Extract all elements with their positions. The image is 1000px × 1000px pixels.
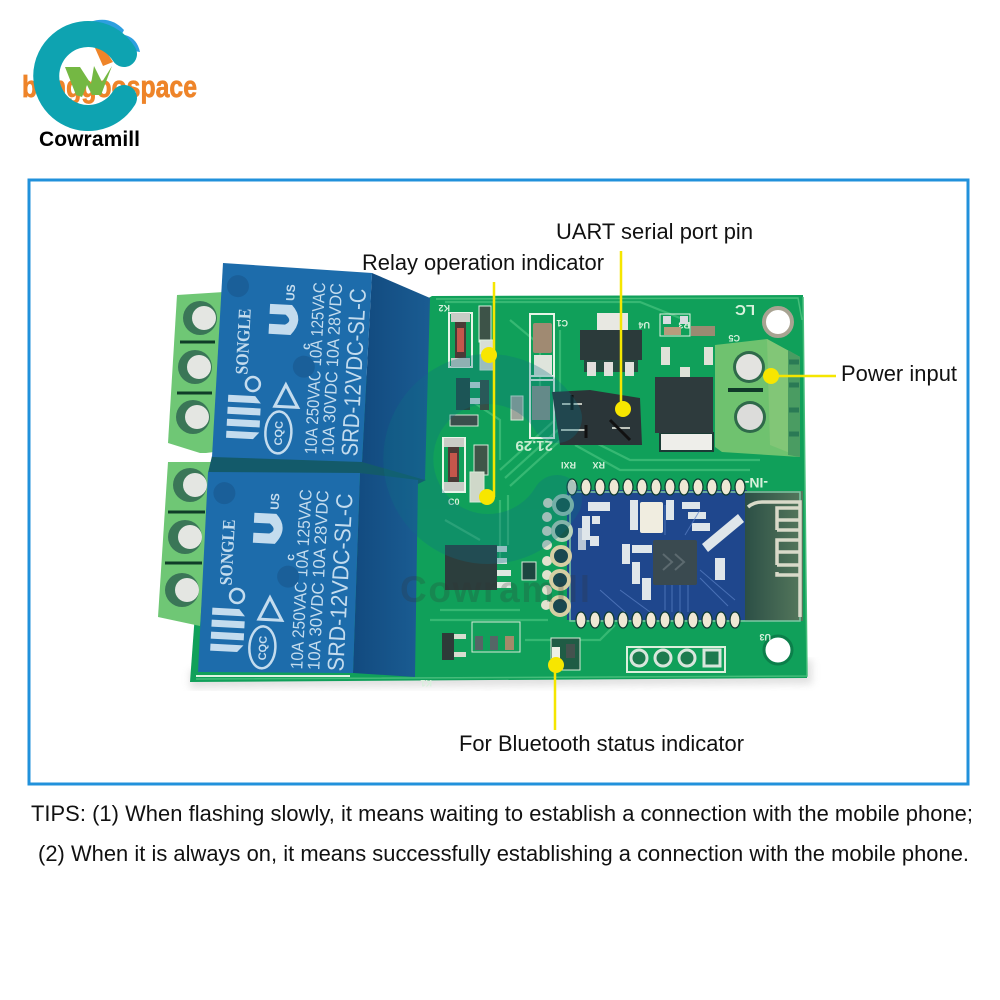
relay K2: 10A 250VAC 10A 125VAC [301,282,329,455]
relay K2: c [299,342,313,350]
callout: Bluetooth status indicator [459,657,744,756]
silkscreen marks: K1 [420,678,432,688]
faint logo watermark: Cowramill [400,569,590,610]
regulator U4 [580,313,642,376]
relay K1: CQC [257,636,270,661]
tips text [31,801,973,866]
power terminal block [715,339,800,457]
bluetooth module [541,479,803,628]
gap shadow between relays [208,456,426,484]
silkscreen marks: LC [735,301,755,318]
silkscreen marks: C0 [448,497,460,507]
tips text: (2) When it is always on, it means successfully establishing a connection with the mobile phone. [38,841,969,866]
relay K1: US [268,493,282,510]
silkscreen marks: U4 [638,320,650,330]
silkscreen marks: R3 [678,320,690,330]
silkscreen marks: U3 [759,632,771,642]
silkscreen marks: K2 [438,303,450,313]
silkscreen marks: C5 [728,333,740,343]
relay K1: c [283,553,297,561]
four pin header pads [627,647,725,672]
silkscreen marks: RX [592,460,605,470]
relay K1: 10A 250VAC 10A 125VAC [287,489,316,670]
callout: relay operation indicator: Relay operation indicator [362,250,604,275]
callout: UART serial port pin: UART serial port pin [556,219,753,244]
relay module photo [158,263,812,688]
green circuit board [190,295,807,688]
upper left screw terminal [168,292,224,453]
logo: Cowramill [39,128,140,151]
callout: power input: Power input [841,361,957,386]
faint logo watermark [400,379,590,610]
lower left screw terminal [158,462,212,626]
callout: relay operation indicator [362,250,604,505]
relay K2: SRD-12VDC-SL-C [336,288,371,457]
mounting holes [764,308,792,664]
relay K2: 10A 30VDC 10A 28VDC [318,283,346,456]
silkscreen marks: 21.29 [515,437,553,454]
silkscreen marks: C1 [556,318,568,328]
silkscreen marks: RXI [561,460,576,470]
logo: banggoospace [22,69,197,104]
UART header pins [552,390,642,445]
relay K1: 10A 30VDC 10A 28VDC [304,490,333,671]
board shadow [190,660,812,688]
callout: power input [763,361,957,386]
silkscreen marks [420,301,771,688]
MOSFET [655,377,713,451]
relay K1 [198,472,418,677]
tips text: TIPS: (1) When flashing slowly, it means waiting to establish a connection with the mobile phone; [31,801,973,826]
relay K2: CQC [273,421,286,446]
blue frame [29,180,968,784]
diodes and small parts [443,306,715,502]
callout: Bluetooth status indicator: For Bluetooth status indicator [459,731,744,756]
callout: UART serial port pin [556,219,753,417]
relay K2: SONGLE [231,308,255,375]
logo [22,20,197,151]
silkscreen marks: -IN- [744,475,768,491]
relay K1: SRD-12VDC-SL-C [322,493,358,672]
relay K2: US [283,284,298,301]
chip U2 and status LED parts [442,545,580,670]
relay K1: SONGLE [216,519,239,586]
relay K2 [212,263,430,480]
